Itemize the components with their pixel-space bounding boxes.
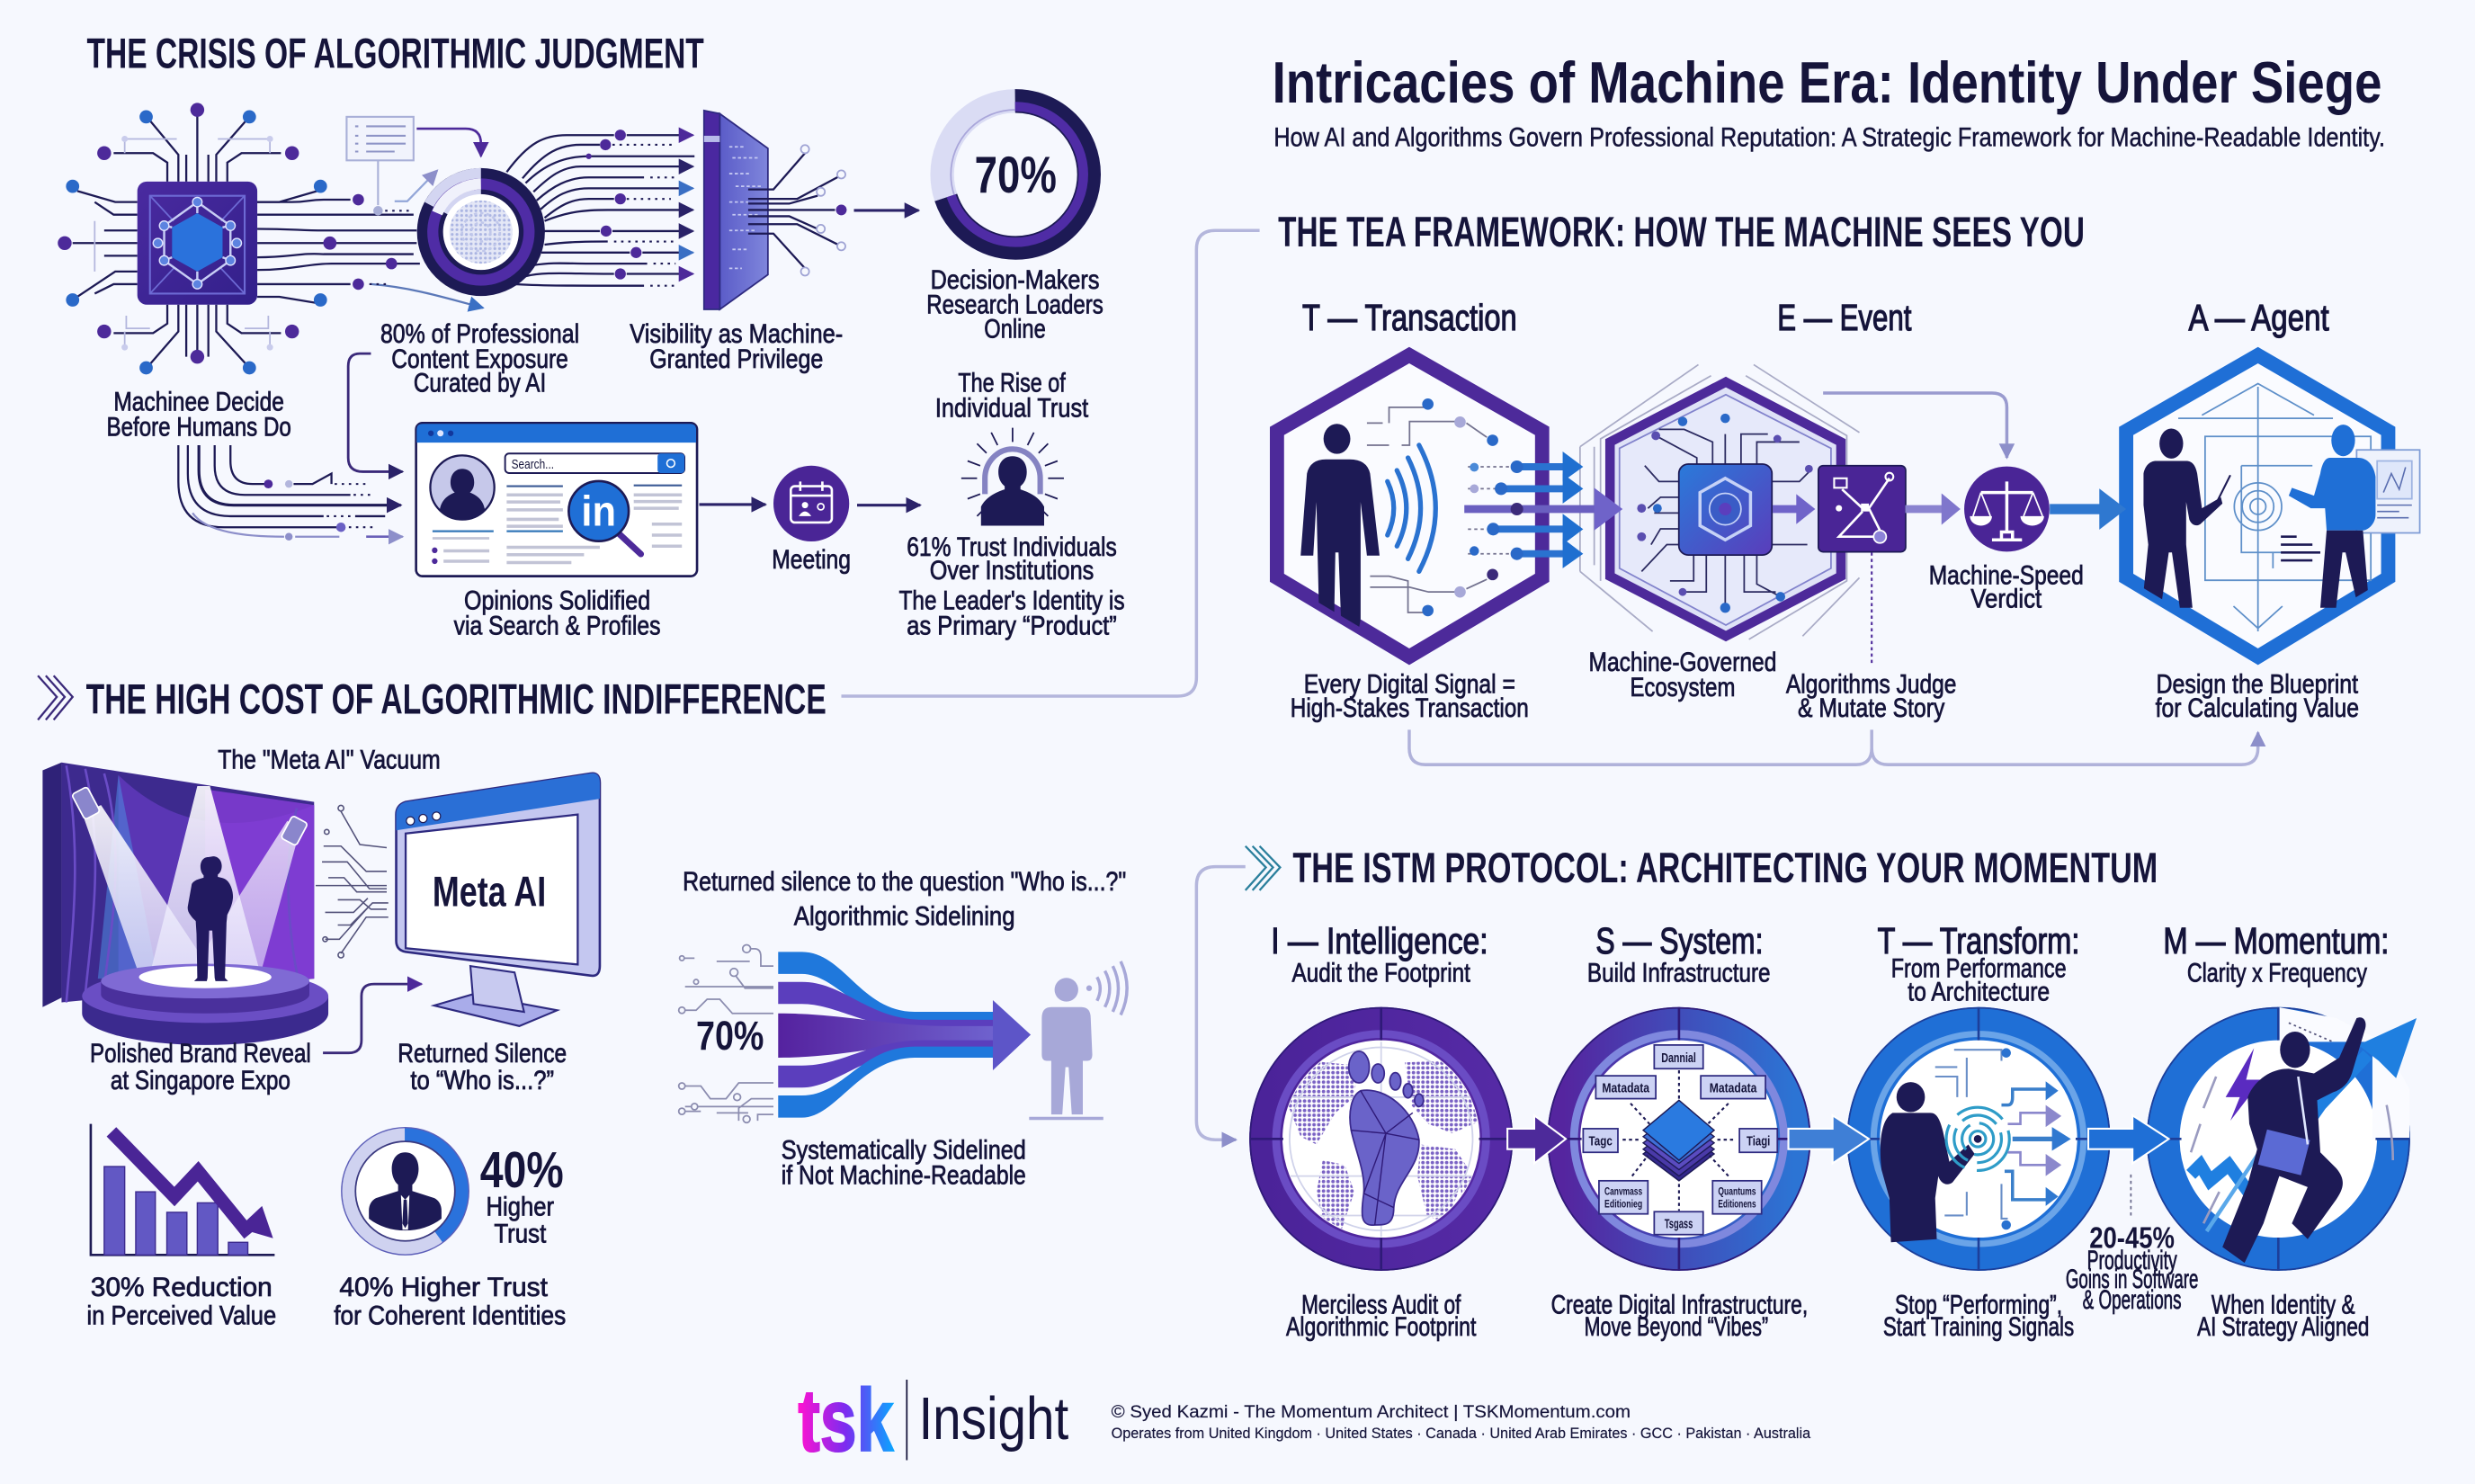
metadata tag boxes: Matadata	[1602, 1082, 1650, 1096]
stat: 20-45 percent productivity: 20-45%	[2089, 1221, 2175, 1255]
label: polished brand reveal	[90, 1039, 311, 1095]
column heads	[1271, 920, 2389, 961]
icon: scales of justice	[1964, 467, 2050, 551]
metadata tag boxes: Editionieg	[1604, 1198, 1642, 1211]
label: 30 percent reduction: in Perceived Value	[87, 1301, 276, 1331]
label: algorithms judge: Algorithms Judge	[1786, 670, 1956, 700]
label: meeting: Meeting	[772, 545, 851, 575]
label: every digital signal	[1291, 670, 1529, 723]
label: machine-governed ecosystem	[1589, 648, 1776, 702]
sub heads: Audit the Footprint	[1292, 959, 1470, 988]
label: design the blueprint	[2156, 670, 2359, 723]
label: when identity and AI aligned: When Identity &	[2211, 1290, 2355, 1319]
icon: stage with spotlights	[42, 763, 328, 1045]
label: merciless audit: Algorithmic Footprint	[1286, 1312, 1477, 1342]
icon: input data traces	[679, 944, 773, 1122]
search box	[505, 453, 684, 473]
hexagon: agent	[2126, 355, 2420, 657]
arrow: meeting to trust	[857, 505, 920, 506]
running businessman	[2222, 1017, 2365, 1263]
label: stop performing: Stop “Performing”,	[1895, 1290, 2062, 1319]
sub heads	[1292, 953, 2367, 1007]
column heads: E — Event	[1777, 297, 1911, 338]
circuit traces	[1641, 429, 1812, 608]
label: trust individuals and leader identity: 61% Trust Individuals	[907, 532, 1117, 562]
panel: the high cost of algorithmic indifference	[38, 230, 1260, 1331]
label: when identity and AI aligned	[2197, 1290, 2369, 1342]
label: decision makers: Research Loaders	[926, 290, 1103, 319]
icon: linkedin magnifier: in	[581, 487, 616, 535]
label: returned silence question	[683, 867, 1126, 932]
label: visibility: Granted Privilege	[649, 344, 823, 374]
diagram: converging sidelining flows	[778, 952, 1031, 1118]
central chip	[1679, 464, 1772, 555]
icon: document with arrow into ring	[346, 117, 481, 216]
metadata tag boxes: Tagc	[1589, 1134, 1613, 1149]
dotted drop line	[1871, 552, 1872, 665]
label: opinions solidified: via Search & Profiles	[454, 612, 661, 641]
donut: 80 percent content curated ring	[417, 168, 545, 296]
label: returned silence: to “Who is...?”	[410, 1066, 554, 1095]
icon: data traces between stage and monitor	[316, 805, 389, 958]
presenter silhouette	[2142, 429, 2230, 608]
signal arcs	[1388, 445, 1435, 571]
arrows: panel outputs to decision makers	[748, 145, 918, 275]
inner arrow	[1773, 494, 1815, 524]
label: trust individuals and leader identity: as Primary “Product”	[907, 612, 1117, 641]
label: coherent identities: for Coherent Identities	[334, 1301, 566, 1331]
label: returned silence question: Algorithmic Sidelining	[794, 902, 1015, 932]
metadata tag boxes: Matadata	[1710, 1082, 1757, 1096]
metadata tag boxes: Tiagi	[1747, 1134, 1770, 1149]
blueprint drawing	[2178, 383, 2371, 631]
label: 80 percent curated	[380, 319, 579, 398]
icon: blueprint sheet	[2356, 450, 2420, 533]
label: stop performing: Start Training Signals	[1883, 1312, 2074, 1342]
label: trust individuals and leader identity	[899, 532, 1125, 641]
logo: insight: Insight	[918, 1386, 1069, 1453]
fingerprint target	[1946, 1107, 2009, 1170]
label: polished brand reveal: Polished Brand Reveal	[90, 1039, 311, 1068]
donut: 40 percent higher trust with portrait	[342, 1128, 469, 1255]
label: machine-speed verdict: Machine-Speed	[1929, 560, 2084, 590]
label: merciless audit	[1286, 1290, 1477, 1342]
label: trust individuals and leader identity: Over Institutions	[930, 556, 1094, 586]
icon: sidelined person with signal waves	[1029, 961, 1127, 1119]
lightning bolt	[2226, 1048, 2262, 1121]
column heads	[1302, 297, 2329, 338]
arrow: I to S	[1507, 1115, 1566, 1164]
icon: chevrons	[38, 675, 73, 720]
label: returned silence: Returned Silence	[398, 1039, 567, 1068]
metadata tag boxes: Editionens	[1718, 1198, 1756, 1211]
stat: 20-45 percent productivity	[2066, 1221, 2198, 1315]
hexagon: transaction	[1277, 355, 1542, 657]
label: algorithms judge	[1786, 670, 1956, 723]
person pressing target	[1881, 1082, 1975, 1242]
dotted connector to productivity stat	[2130, 1175, 2131, 1219]
heading: TEA framework: THE TEA FRAMEWORK: HOW THE MACHINE SEES YOU	[1278, 209, 2085, 256]
icon: algorithm graph tile	[1818, 466, 1906, 552]
heading: high cost: THE HIGH COST OF ALGORITHMIC INDIFFERENCE	[86, 675, 826, 723]
label: visibility	[630, 319, 843, 374]
donut value: 70%	[975, 147, 1057, 204]
icon: individual trust person with rays	[961, 428, 1064, 525]
stat: 70 percent: 70%	[696, 1013, 764, 1059]
chart: declining bars	[91, 1124, 274, 1255]
label: returned silence	[398, 1039, 567, 1095]
label: opinions solidified: Opinions Solidified	[464, 586, 650, 615]
chart: falling arrow	[112, 1131, 249, 1235]
stat: 40 percent higher trust: Trust	[494, 1219, 547, 1248]
search box: Search...	[512, 458, 554, 472]
operations line: Operates from United Kingdom · United States · Canada · United Arab Emirates · GCC · Pakistan · Australia	[1112, 1425, 1811, 1442]
label: 80 percent curated: Curated by AI	[414, 368, 546, 398]
heading: crisis: THE CRISIS OF ALGORITHMIC JUDGMENT	[87, 30, 704, 77]
label: every digital signal: Every Digital Signal =	[1304, 670, 1515, 700]
arrow: verdict to agent	[2050, 488, 2126, 530]
sub heads: to Architecture	[1908, 978, 2050, 1007]
label: design the blueprint: Design the Blueprint	[2156, 670, 2359, 700]
arrows: lines from chip into browser	[178, 353, 403, 541]
label: create digital infrastructure: Create Digital Infrastructure,	[1551, 1290, 1808, 1319]
icon: AI chip with circuit traces	[58, 103, 327, 374]
label: polished brand reveal: at Singapore Expo	[111, 1066, 290, 1095]
label: machine-speed verdict	[1929, 560, 2084, 614]
label: 80 percent curated: 80% of Professional	[380, 319, 579, 349]
ring: momentum	[2148, 1007, 2417, 1271]
ring: system stack	[1548, 1007, 1810, 1271]
ring: intelligence footprint	[1250, 1007, 1512, 1271]
label: systematically sidelined: if Not Machine-Readable	[782, 1160, 1026, 1190]
label: when identity and AI aligned: AI Strategy Aligned	[2197, 1312, 2369, 1342]
spotlight beams	[82, 786, 299, 974]
heading: ISTM protocol: THE ISTM PROTOCOL: ARCHITECTING YOUR MOMENTUM	[1292, 845, 2158, 892]
label: create digital infrastructure: Move Beyond “Vibes”	[1585, 1312, 1768, 1342]
label: opinions solidified	[454, 586, 661, 641]
title block	[1273, 49, 2385, 152]
world map dots	[1289, 1061, 1477, 1229]
arrow: T to M	[2088, 1115, 2169, 1164]
label: decision makers	[926, 265, 1103, 344]
label: stop performing	[1883, 1290, 2074, 1342]
profile avatar	[430, 455, 495, 520]
panel: the TEA framework	[1277, 209, 2420, 764]
logo: tsk: tsk	[798, 1371, 894, 1470]
label: merciless audit: Merciless Audit of	[1301, 1290, 1461, 1319]
label: rise of individual trust: Individual Trust	[935, 393, 1089, 423]
arrows: signals into ecosystem	[1464, 451, 1622, 568]
stat: 20-45 percent productivity: Goins in Software	[2066, 1265, 2198, 1294]
footprint	[1349, 1051, 1424, 1225]
ring: transform	[1847, 1007, 2110, 1271]
person silhouette	[1300, 424, 1380, 638]
label: coherent identities	[334, 1273, 566, 1331]
layered stack	[1643, 1100, 1714, 1181]
stat: 40 percent higher trust: 40%	[480, 1141, 564, 1198]
label: coherent identities: 40% Higher Trust	[339, 1273, 549, 1302]
icon: chevrons	[1246, 846, 1280, 890]
copyright line: © Syed Kazmi - The Momentum Architect | TSKMomentum.com	[1112, 1403, 1631, 1422]
arrow: bottom bracket to agent	[1409, 729, 2258, 764]
label: visibility: Visibility as Machine-	[630, 319, 843, 349]
sub heads: Build Infrastructure	[1587, 959, 1771, 988]
label: decision makers: Online	[984, 315, 1046, 344]
sub heads: Clarity x Frequency	[2187, 959, 2367, 988]
column heads: M — Momentum:	[2163, 920, 2389, 961]
stat: 20-45 percent productivity: Productivity	[2087, 1246, 2177, 1275]
metadata tag boxes: Quantums	[1718, 1185, 1756, 1198]
speaker silhouette	[188, 856, 233, 981]
label: meta AI vacuum: The "Meta AI" Vacuum	[218, 746, 441, 775]
label: design the blueprint: for Calculating Value	[2156, 693, 2359, 723]
label: machines decide: Before Humans Do	[106, 412, 291, 442]
logo divider	[906, 1380, 907, 1460]
label: returned silence question: Returned silence to the question "Who is...?"	[683, 867, 1126, 897]
metadata tag boxes: Tsgass	[1665, 1217, 1693, 1231]
monitor text: Meta AI	[433, 868, 546, 916]
output arrows	[2001, 1089, 2060, 1200]
label: rise of individual trust	[935, 368, 1089, 423]
metadata tag boxes: Canvmass	[1604, 1185, 1642, 1198]
icon: visibility gate panel	[704, 111, 768, 309]
label: 80 percent curated: Content Exposure	[391, 344, 568, 374]
footer	[798, 1371, 1811, 1470]
icon: linkedin magnifier	[568, 481, 641, 554]
hexagon: machine-governed ecosystem	[1580, 364, 1860, 639]
architect silhouette	[2331, 425, 2355, 456]
arrows: signal lines to visibility panel	[506, 130, 694, 286]
connector to TEA framework	[841, 230, 1260, 696]
column heads: I — Intelligence:	[1271, 920, 1488, 961]
column heads: S — System:	[1595, 920, 1763, 961]
label: trust individuals and leader identity: The Leader's Identity is	[899, 586, 1125, 615]
arrow: reveal to returned silence	[323, 984, 422, 1053]
label: create digital infrastructure	[1551, 1290, 1808, 1342]
label: 30 percent reduction: 30% Reduction	[91, 1273, 273, 1302]
column heads: T — Transaction	[1302, 297, 1517, 338]
icon: meeting calendar	[773, 466, 849, 541]
rising arrow	[2191, 1054, 2368, 1200]
icon: monitor with Meta AI	[397, 773, 600, 1026]
stat: 40 percent higher trust: Higher	[487, 1192, 554, 1221]
label: decision makers: Decision-Makers	[931, 265, 1099, 295]
label: machines decide	[106, 387, 291, 442]
label: machine-governed ecosystem: Machine-Governed	[1589, 648, 1776, 677]
panel: the ISTM protocol	[1196, 845, 2417, 1342]
arrow: S to T	[1789, 1115, 1869, 1164]
column heads: A — Agent	[2188, 297, 2329, 338]
arrows: flow from chip to curation ring	[257, 171, 483, 308]
stage platforms	[82, 964, 328, 1045]
stat: 20-45 percent productivity: & Operations	[2083, 1285, 2182, 1315]
arrow: algorithm to verdict	[1905, 493, 1961, 525]
label: machines decide: Machinee Decide	[113, 387, 284, 416]
panel: the crisis of algorithmic judgment	[58, 30, 1125, 641]
label: algorithms judge: & Mutate Story	[1798, 693, 1944, 723]
label: systematically sidelined	[782, 1135, 1026, 1190]
connector into intelligence	[1196, 867, 1246, 1140]
label: 30 percent reduction	[87, 1273, 276, 1331]
circuit traces	[1367, 407, 1487, 612]
label: every digital signal: High-Stakes Transaction	[1291, 693, 1529, 723]
panel: search browser window	[416, 423, 697, 577]
arrow: ecosystem to verdict	[1823, 393, 2006, 458]
column heads: T — Transform:	[1878, 920, 2079, 961]
metadata tag boxes: Dannial	[1661, 1051, 1696, 1066]
arrow: browser to meeting	[700, 504, 765, 505]
label: rise of individual trust: The Rise of	[958, 368, 1066, 398]
donut: 70 percent decision makers	[943, 101, 1089, 248]
label: machine-speed verdict: Verdict	[1970, 585, 2042, 614]
stat: 40 percent higher trust	[480, 1141, 564, 1248]
sub heads: From Performance	[1891, 953, 2067, 983]
metadata tag boxes	[1583, 1045, 1777, 1235]
label: machine-governed ecosystem: Ecosystem	[1630, 673, 1735, 702]
label: systematically sidelined: Systematically Sidelined	[782, 1135, 1026, 1165]
